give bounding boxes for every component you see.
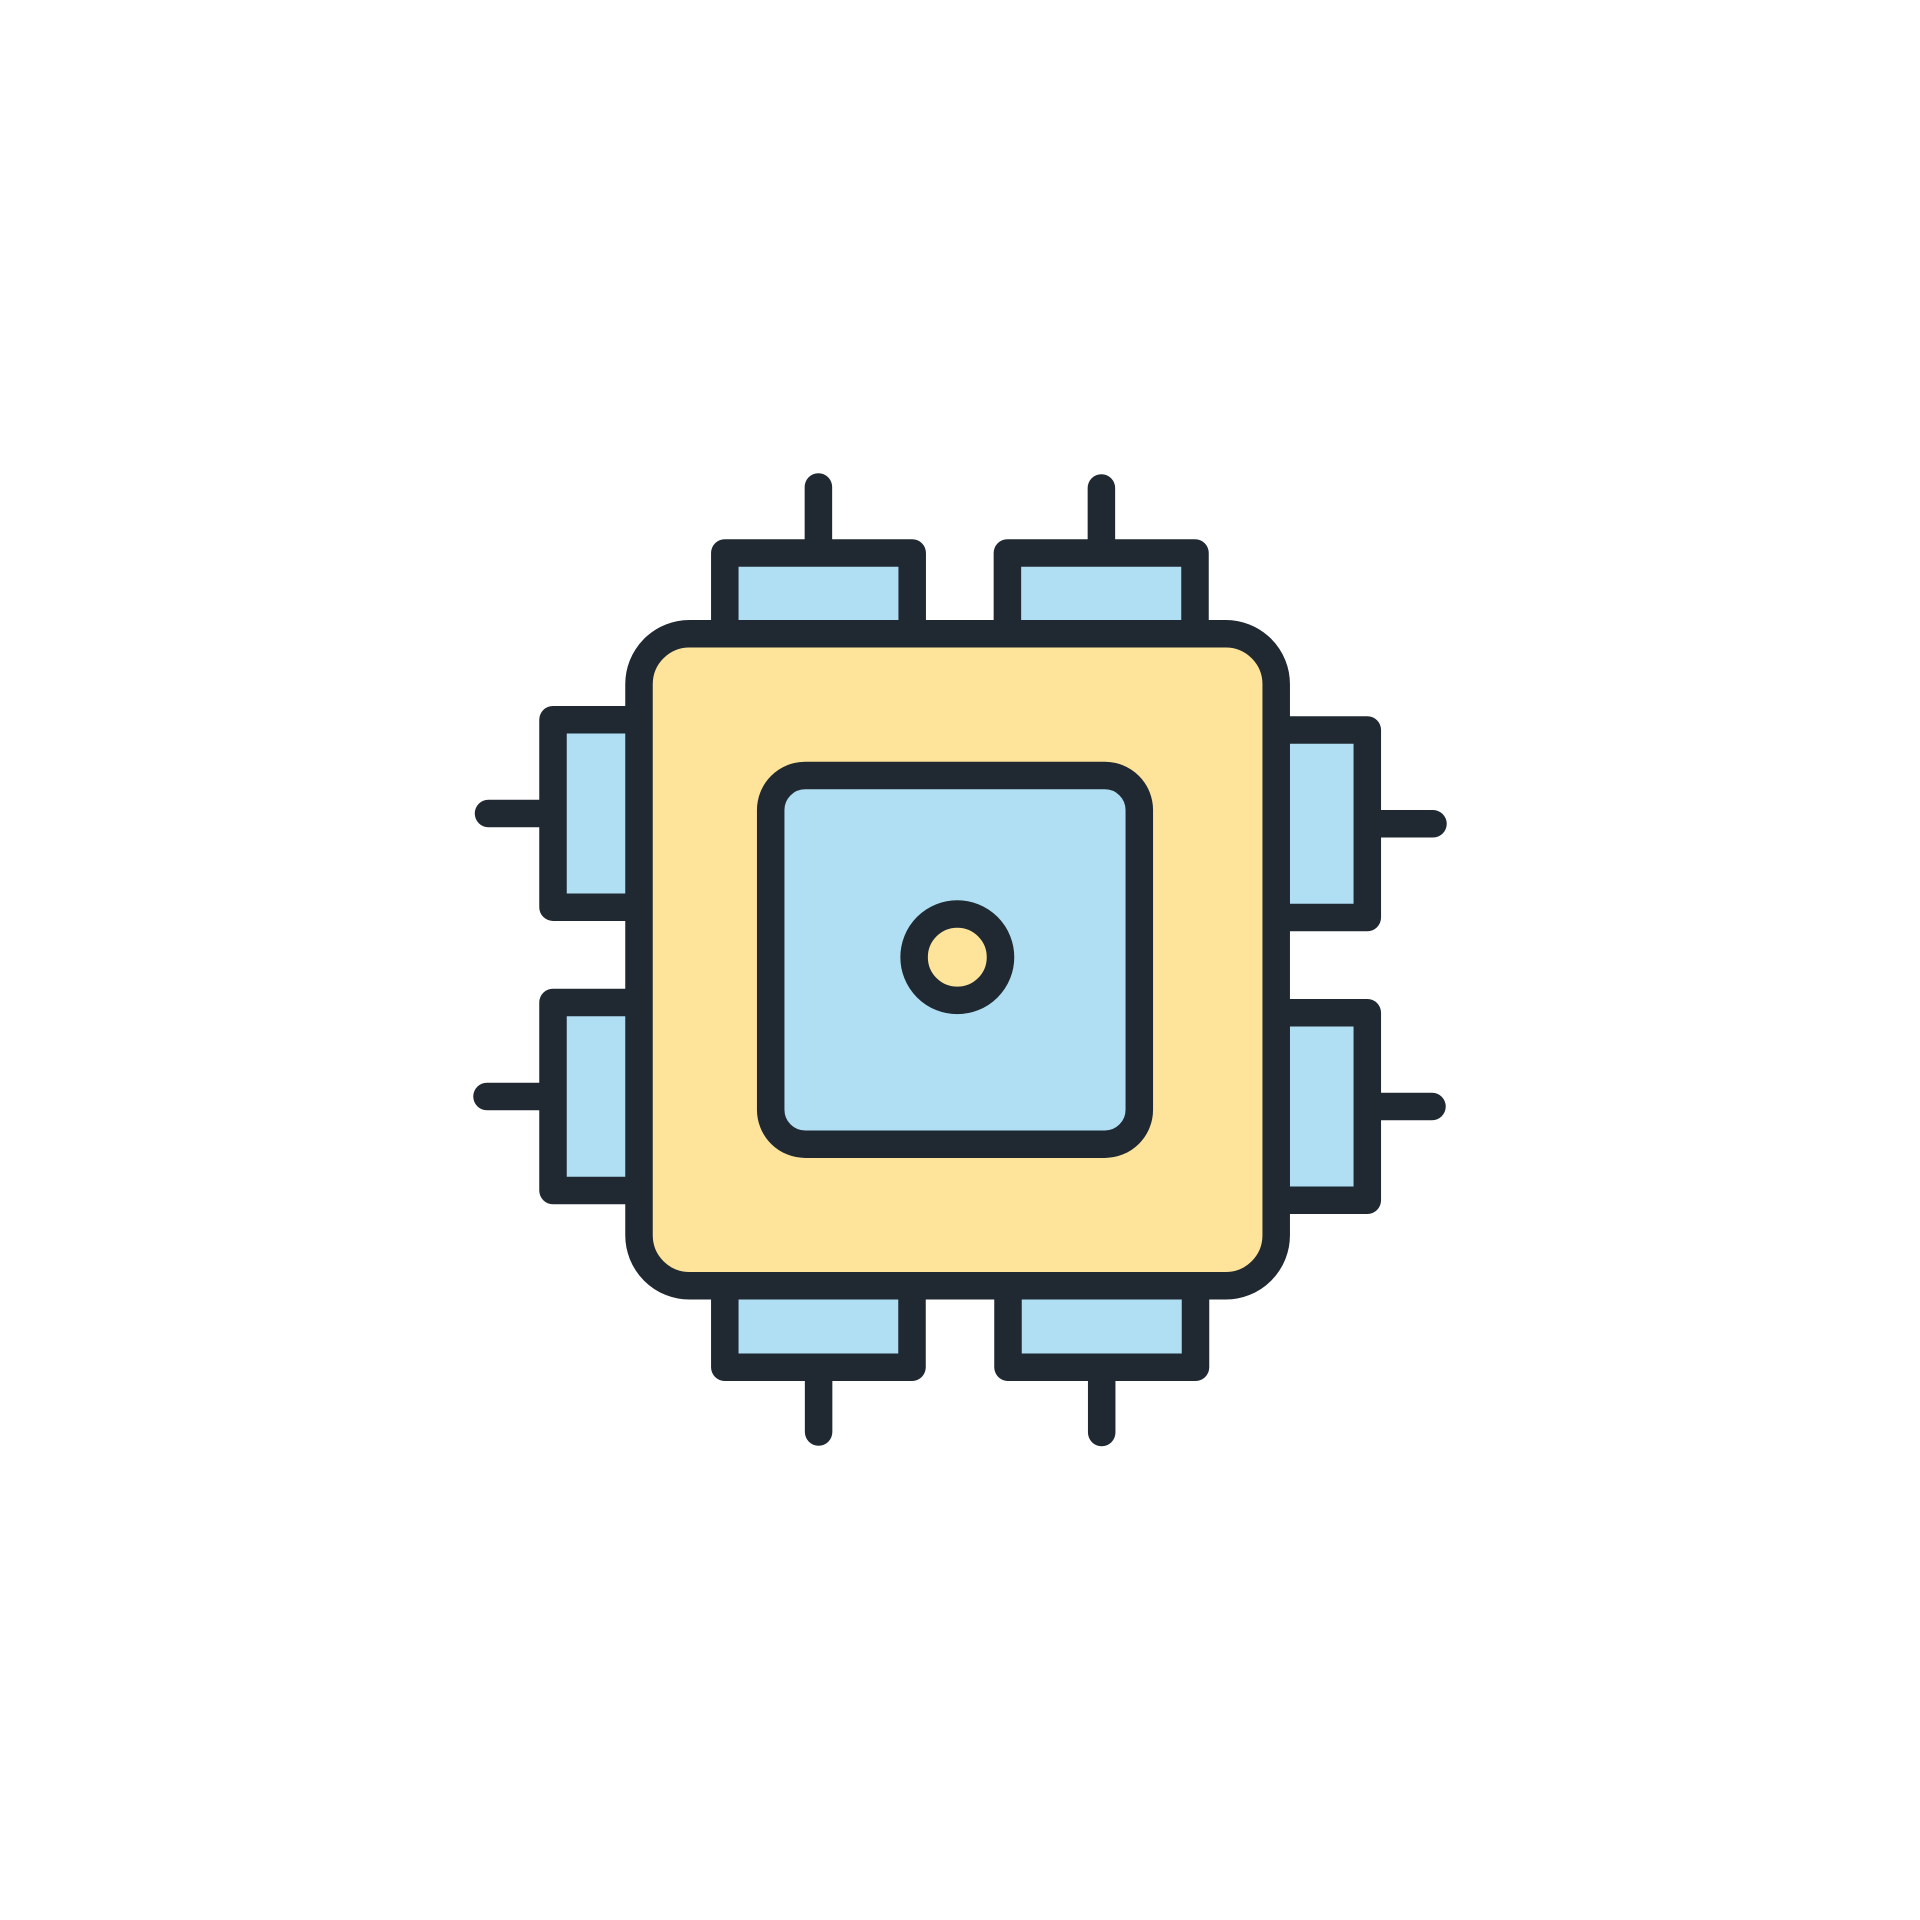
pin: left bottom [487,1002,640,1190]
center circle [914,914,1000,1000]
pin: bottom left [725,1285,912,1432]
pin: top left [725,487,912,634]
pin: right top [1276,730,1433,918]
pin: top right [1007,488,1195,634]
chip body [639,634,1276,1286]
pin: left top [488,720,640,907]
pin: bottom right [1008,1285,1196,1432]
chip core [771,776,1139,1144]
pin: right bottom [1276,1013,1432,1200]
